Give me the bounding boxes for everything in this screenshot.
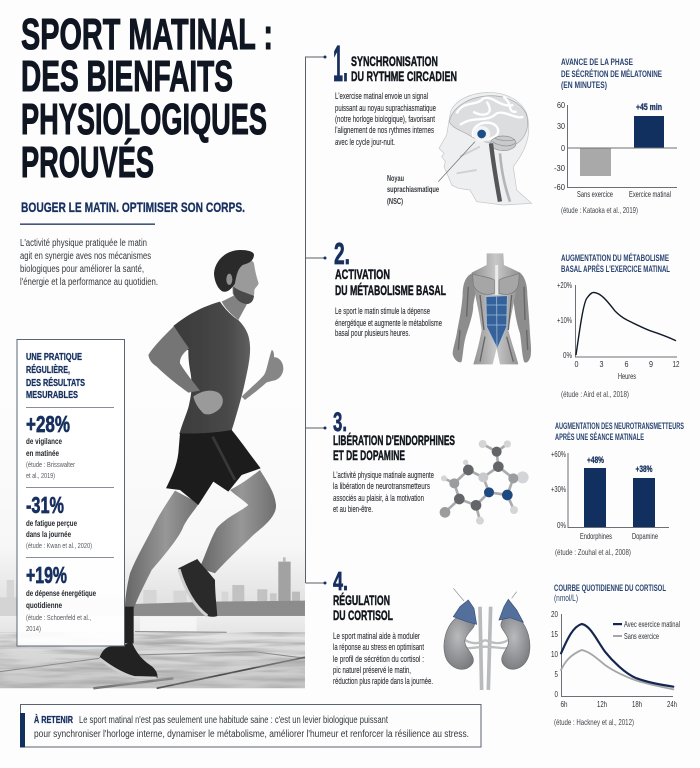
text 1: l'alignement de nos rythmes internes bbox=[335, 125, 434, 135]
chart 1: melatonin: -60 bbox=[554, 182, 565, 192]
section 2: basal metabolism bbox=[334, 236, 531, 364]
title: SPORT MATINAL : bbox=[21, 10, 273, 59]
heading 2: ACTIVATION bbox=[335, 266, 390, 282]
upper arm bbox=[148, 326, 200, 393]
chart 4: cortisol curve: 12h bbox=[597, 699, 607, 709]
stat: +19%: (étude : Schoenfeld et al., bbox=[26, 613, 91, 622]
panel heading: UNE PRATIQUE bbox=[26, 351, 82, 363]
stat: +28%: +28% bbox=[26, 411, 70, 437]
intro paragraph: l'énergie et la performance au quotidien. bbox=[20, 277, 158, 288]
intro paragraph: agit en synergie aves nos mécanismes bbox=[20, 251, 151, 262]
pavement texture bbox=[0, 632, 305, 688]
panel: key results bbox=[17, 340, 124, 646]
chart 1: melatonin: 30 bbox=[557, 121, 565, 131]
hair bbox=[214, 250, 254, 292]
chart 4: cortisol curve: 6h bbox=[560, 699, 568, 709]
legend bbox=[613, 619, 680, 641]
chart 4: cortisol curve: (étude : Hackney et al., 2012) bbox=[554, 717, 634, 727]
title: PROUVÉS bbox=[21, 137, 154, 187]
chart 3: neurotransmitters bbox=[551, 421, 684, 557]
stat: +19%: de dépense énergétique bbox=[26, 588, 96, 598]
label: NSC: (NSC) bbox=[387, 196, 403, 206]
label: NSC: Noyau bbox=[387, 173, 404, 183]
line bbox=[576, 292, 676, 355]
chart title bbox=[561, 57, 662, 90]
stat: +19%: +19% bbox=[26, 562, 67, 588]
stat: +28% bbox=[26, 411, 75, 480]
chart title: (EN MINUTES) bbox=[561, 80, 607, 90]
chart title: (nmol/L) bbox=[554, 593, 578, 603]
heading 2: DU MÉTABOLISME BASAL bbox=[335, 282, 446, 298]
text 2: basal pour plusieurs heures. bbox=[335, 328, 410, 338]
rear leg bbox=[125, 491, 199, 608]
chart 2: metabolism curve: 0 bbox=[574, 359, 579, 369]
stat: +28%: en matinée bbox=[26, 448, 59, 458]
chart title bbox=[554, 583, 666, 603]
stat: +28%: et al., 2019) bbox=[26, 471, 55, 480]
heading 1 bbox=[351, 53, 457, 84]
front shoe bbox=[178, 559, 217, 617]
chart 1: melatonin: 0 bbox=[561, 143, 565, 153]
text 3: et au bien-être. bbox=[333, 504, 373, 514]
chart title: AVANCE DE LA PHASE bbox=[561, 57, 633, 67]
face bbox=[232, 259, 259, 304]
intro paragraph: biologiques pour améliorer la santé, bbox=[20, 264, 144, 275]
callout: key takeaway: À RETENIR bbox=[34, 713, 74, 726]
panel heading: DES RÉSULTATS bbox=[26, 376, 85, 389]
photo: runner on waterfront bbox=[0, 250, 305, 688]
chart 2: metabolism curve: Heures bbox=[618, 371, 636, 381]
text 3: la libération de neurotransmetteurs bbox=[333, 481, 430, 491]
chart 4: cortisol curve: 10 bbox=[551, 649, 558, 659]
stat: +19%: quotidienne bbox=[26, 600, 62, 610]
shirt bbox=[173, 302, 250, 434]
legend: Sans exercice bbox=[624, 631, 659, 641]
heading 4 bbox=[333, 592, 393, 623]
chart 4: cortisol curve: 24h bbox=[667, 699, 677, 709]
stat: -31%: de fatigue perçue bbox=[26, 518, 77, 528]
title bbox=[21, 10, 273, 187]
icon: kidneys and adrenal glands bbox=[444, 588, 530, 690]
bars bbox=[584, 468, 655, 527]
chart 3: neurotransmitters: +60% bbox=[551, 449, 566, 459]
chart 2: metabolism curve: 12 bbox=[672, 359, 680, 369]
chart 4: cortisol curve: 18h bbox=[632, 699, 642, 709]
skyline and ground bbox=[0, 557, 305, 688]
panel heading: MESURABLES bbox=[26, 389, 78, 401]
subtitle: BOUGER LE MATIN. OPTIMISER SON CORPS. bbox=[21, 199, 245, 215]
label: NSC: suprachiasmatique bbox=[387, 184, 439, 194]
chart 3: neurotransmitters: +30% bbox=[551, 484, 566, 494]
chart 3: neurotransmitters: +48% bbox=[587, 455, 604, 466]
chart title bbox=[555, 421, 684, 442]
text 1 bbox=[335, 91, 436, 147]
callout: key takeaway: pour synchroniser l'horloge interne, dynamiser le métabolisme, améliorer l'humeur et renforcer la résilience au stress. bbox=[34, 729, 469, 740]
text 4: pic naturel préservé le matin, bbox=[333, 665, 411, 675]
chart 2: metabolism curve: 3 bbox=[600, 359, 604, 369]
section 1: circadian rhythm: 1. bbox=[333, 35, 348, 92]
text 3: L'activité physique matinale augmente bbox=[333, 470, 434, 480]
heading 1: SYNCHRONISATION bbox=[351, 53, 438, 69]
stat: +19%: 2014) bbox=[26, 624, 41, 633]
chart 2: metabolism curve bbox=[557, 253, 680, 399]
heading 3 bbox=[333, 432, 455, 463]
label: NSC bbox=[387, 173, 439, 206]
runner figure bbox=[125, 250, 283, 617]
chart 3: neurotransmitters: Endorphines bbox=[580, 531, 612, 541]
number 3: 3. bbox=[333, 407, 347, 437]
chart 3: neurotransmitters: Dopamine bbox=[632, 531, 658, 541]
number 4: 4. bbox=[333, 566, 348, 596]
stat: +19% bbox=[26, 562, 96, 633]
text 1: L'exercise matinal envoie un signal bbox=[335, 91, 428, 101]
panel heading bbox=[26, 351, 85, 401]
text 1: puissant au noyau suprachiasmatique bbox=[335, 103, 436, 113]
heading 3: ET DE DOPAMINE bbox=[333, 447, 405, 463]
stat: +28%: de vigilance bbox=[26, 436, 62, 446]
chart 4: cortisol curve: 20 bbox=[551, 609, 558, 619]
title: PHYSIOLOGIQUES bbox=[21, 95, 267, 144]
chart 3: neurotransmitters: 0% bbox=[557, 520, 566, 530]
intro paragraph: L'activité physique pratiquée le matin bbox=[20, 238, 147, 249]
chart 1: melatonin: Exercice matinal bbox=[629, 189, 671, 199]
panel heading: RÉGULIÈRE, bbox=[26, 363, 70, 376]
text 3 bbox=[333, 470, 434, 514]
heading 3: LIBÉRATION D'ENDORPHINES bbox=[333, 432, 455, 448]
chart 2: metabolism curve: 0% bbox=[563, 350, 572, 360]
chart 4: cortisol curve: 5 bbox=[554, 669, 558, 679]
text 3: associés au plaisir, à la motivation bbox=[333, 493, 424, 503]
chart 1: melatonin: +45 min bbox=[636, 102, 662, 112]
chart 3: neurotransmitters: +38% bbox=[636, 464, 653, 475]
stat: -31%: (étude : Kwan et al., 2020) bbox=[26, 541, 92, 550]
hand bbox=[193, 391, 223, 414]
chart 1: melatonin bbox=[554, 57, 677, 215]
section 3: endorphins bbox=[333, 407, 529, 525]
text 4 bbox=[333, 631, 433, 686]
title: DES BIENFAITS bbox=[21, 52, 233, 101]
stat: -31%: -31% bbox=[26, 492, 64, 518]
text 2: Le sport le matin stimule la dépense bbox=[335, 306, 430, 316]
chart 2: metabolism curve: +20% bbox=[557, 280, 572, 290]
stat: -31% bbox=[26, 492, 92, 550]
chart 2: metabolism curve: 9 bbox=[649, 359, 653, 369]
section 4: cortisol bbox=[333, 566, 530, 690]
callout: key takeaway bbox=[20, 704, 481, 748]
chart 1: melatonin: 60 bbox=[557, 100, 565, 110]
connector lines bbox=[306, 56, 326, 584]
text 4: Le sport matinal aide à moduler bbox=[333, 631, 420, 641]
heading 2 bbox=[335, 266, 446, 298]
chart 1: melatonin: (étude : Kataoka et al., 2019) bbox=[561, 205, 638, 215]
text 4: la réponse au stress en optimisant bbox=[333, 642, 424, 652]
heading 4: RÉGULATION bbox=[333, 592, 390, 608]
chart 4: cortisol curve: 0 bbox=[554, 689, 558, 699]
chart title: APRÈS UNE SÉANCE MATINALE bbox=[555, 432, 644, 442]
text 1: (notre horloge biologique), favorisant bbox=[335, 114, 435, 124]
heading 1: DU RYTHME CIRCADIEN bbox=[351, 68, 457, 84]
icon: torso with abdominals bbox=[453, 253, 531, 364]
chart 1: melatonin: Sans exercice bbox=[577, 189, 613, 199]
neck bbox=[222, 295, 247, 320]
callout: key takeaway: Le sport matinal n'est pas seulement une habitude saine : c'est un levier biologique puissant bbox=[79, 715, 388, 726]
text 4: le profil de sécrétion du cortisol : bbox=[333, 654, 424, 664]
curves bbox=[561, 624, 673, 689]
chart 4: cortisol curve: 15 bbox=[551, 629, 558, 639]
chart 1: melatonin: -30 bbox=[554, 163, 565, 173]
stat: -31%: dans la journée bbox=[26, 529, 71, 539]
front leg bbox=[199, 470, 276, 573]
chart 2: metabolism curve: +10% bbox=[557, 315, 572, 325]
chart 2: metabolism curve: 6 bbox=[624, 359, 629, 369]
chart 4: cortisol curve bbox=[551, 583, 680, 727]
front arm bbox=[242, 350, 283, 400]
chart 3: neurotransmitters: (étude : Zouhal et al., 2008) bbox=[555, 547, 631, 557]
bars bbox=[580, 116, 664, 176]
section 1: circadian rhythm bbox=[333, 35, 532, 206]
text 4: réduction plus rapide dans la journée. bbox=[333, 676, 433, 686]
rear foot bbox=[99, 607, 157, 679]
chart title bbox=[561, 253, 670, 274]
text 2: énergétique et augmente le métabolisme bbox=[335, 318, 442, 328]
text 1: avec le cycle jour-nuit. bbox=[335, 137, 395, 147]
heading 4: DU CORTISOL bbox=[333, 607, 393, 623]
chart 2: metabolism curve: (étude : Aird et al., 2018) bbox=[561, 389, 629, 399]
icon: head and brain bbox=[438, 92, 532, 205]
intro paragraph bbox=[20, 238, 158, 288]
number 2: 2. bbox=[334, 236, 350, 271]
icon: molecule bbox=[440, 440, 529, 525]
shorts bbox=[166, 430, 261, 505]
text 2 bbox=[335, 306, 442, 338]
stat: +28%: (étude : Brisswalter bbox=[26, 460, 75, 469]
